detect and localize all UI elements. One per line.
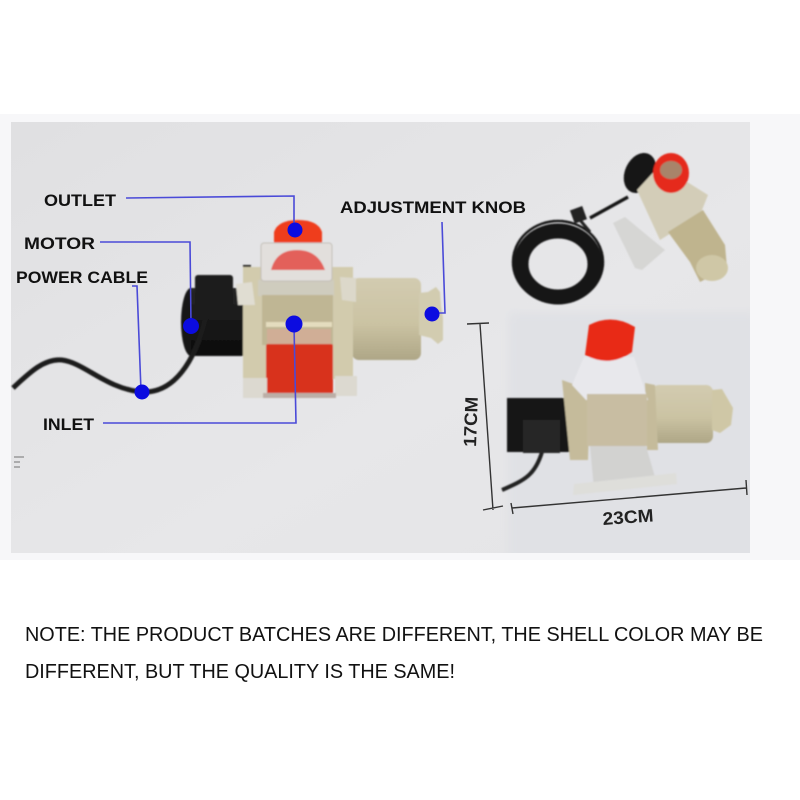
small housing [637,165,708,240]
red inlet block [266,344,333,394]
small motor [618,148,662,198]
photo panel [11,122,750,553]
leader line: outlet [126,196,294,230]
left edge marks [14,457,24,467]
product diagram [10,122,762,682]
leader line: adjustment knob [432,222,445,313]
page backdrop strip [0,114,800,560]
small red outlet [653,153,689,193]
main pump photo [13,220,443,398]
clear top cover with red outlet [261,220,332,281]
labels: POWER CABLE [16,268,148,287]
dimension: 17CM [460,323,503,510]
labels: OUTLET [44,191,117,210]
base plate [573,473,677,495]
marker dots [134,222,440,400]
small cylinder [668,210,727,282]
right cylinder [352,278,443,360]
cable [502,452,542,490]
dimension: 17CM: 17CM [460,396,482,447]
plug [570,206,590,232]
power cable [13,302,212,392]
clear hopper housing [562,357,658,489]
labels: ADJUSTMENT KNOB [340,198,526,217]
base plate [243,376,357,398]
labels: MOTOR [24,234,95,253]
small knob [696,255,728,281]
pump housing [236,267,356,379]
note text: DIFFERENT, BUT THE QUALITY IS THE SAME! [25,661,455,683]
lower right pump photo [502,319,733,495]
leader line: inlet [103,325,296,423]
leader line: motor [100,242,191,325]
dimension: 23CM: 23CM [602,505,654,529]
leader line: power cable [132,286,141,391]
motor [181,265,251,385]
small base plate [613,217,665,270]
coiled cord [513,197,628,303]
beige cylinder [652,385,733,443]
dimension: 23CM [511,480,747,529]
upper right pump photo with coiled cord [513,148,728,303]
red outlet cone [585,319,635,361]
black motor [507,398,573,453]
note text: NOTE: THE PRODUCT BATCHES ARE DIFFERENT, THE SHELL COLOR MAY BE [25,624,763,646]
note text [25,624,763,683]
lower right photo inset [508,312,758,562]
labels [16,191,526,434]
labels: INLET [43,415,95,434]
